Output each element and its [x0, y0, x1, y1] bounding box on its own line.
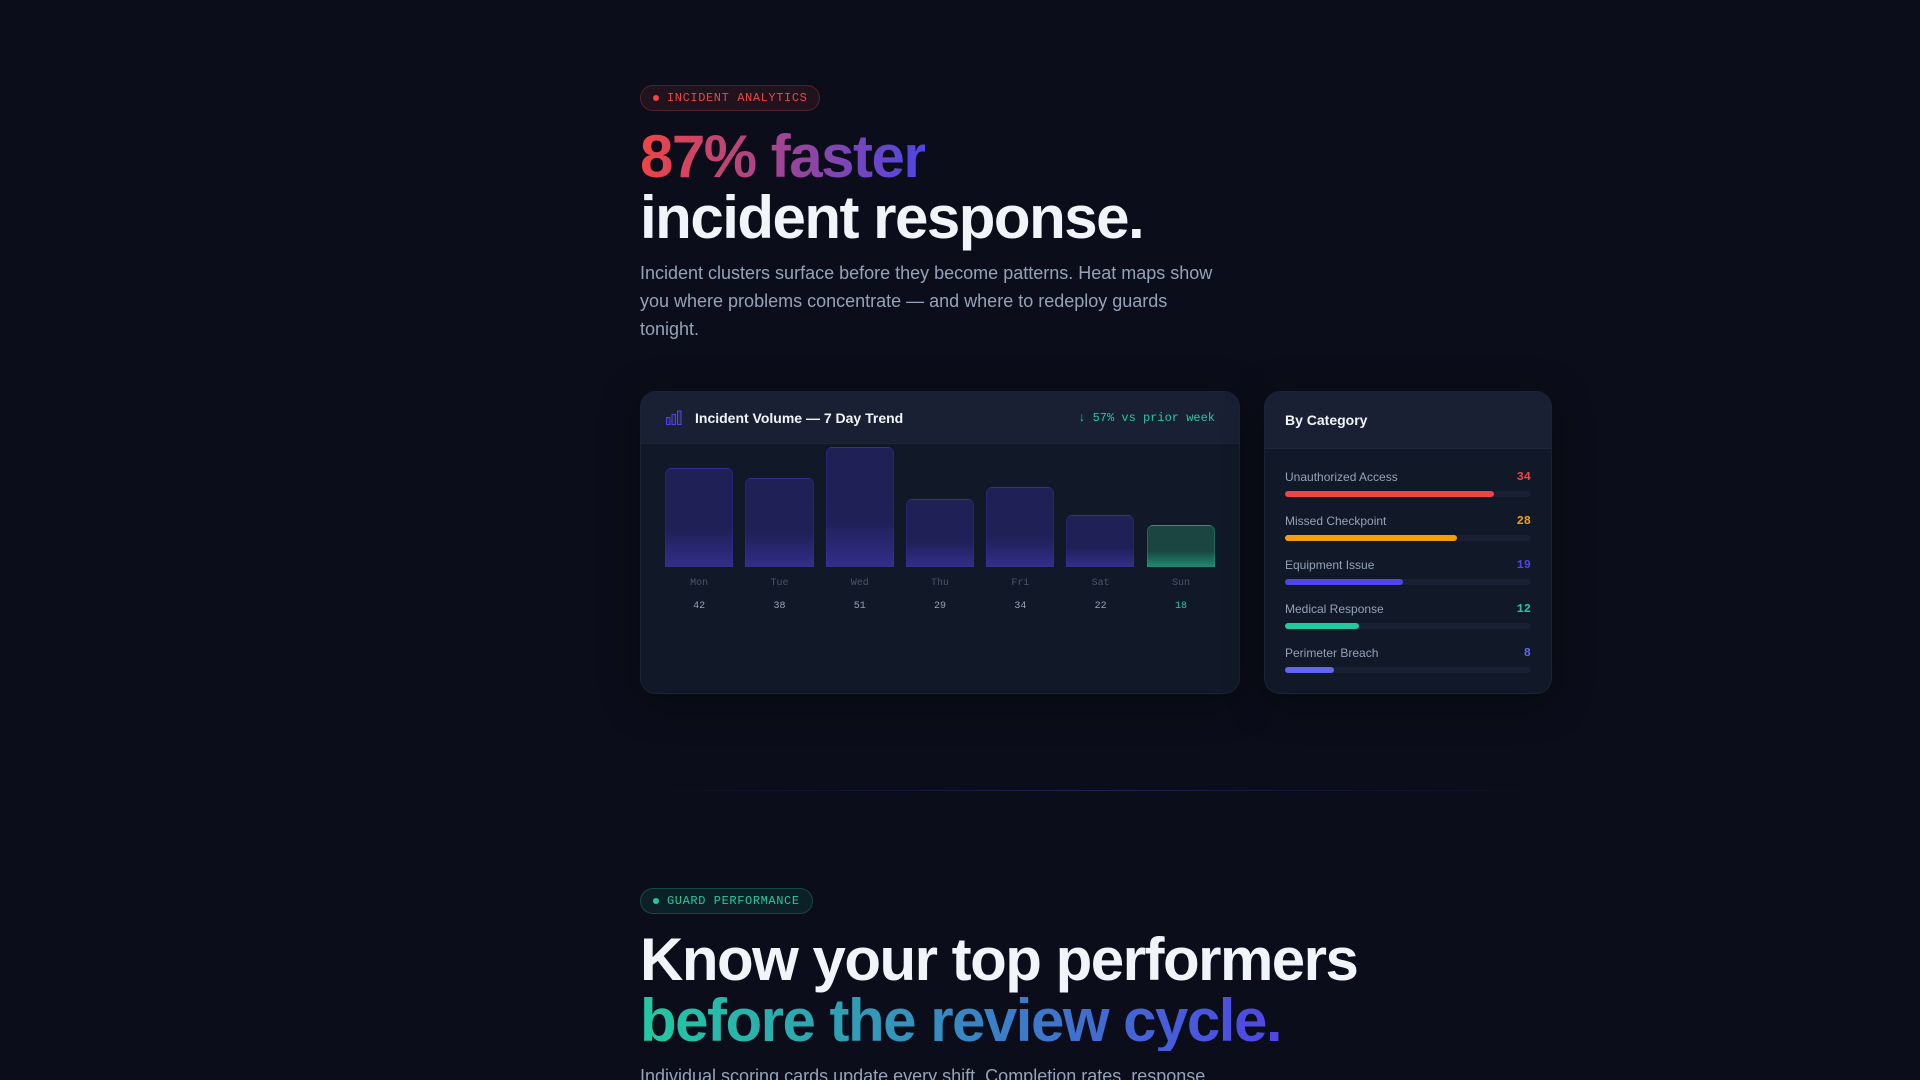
value labels: 42: [693, 601, 705, 612]
chart title: Incident Volume — 7 Day Trend: [695, 410, 903, 426]
bar: Thu: [906, 499, 974, 567]
row: unauthorized access: 34: [1517, 470, 1531, 484]
axis labels: [690, 578, 1190, 589]
row: perimeter breach: 8: [1524, 646, 1531, 660]
row: missed checkpoint: 28: [1517, 514, 1531, 528]
row: perimeter breach: [1285, 646, 1531, 673]
badge: guard performance: [640, 888, 813, 914]
row: unauthorized access: [1285, 470, 1531, 497]
row: medical response: 12: [1517, 602, 1531, 616]
axis labels: Thu: [931, 578, 949, 589]
bar: Tue: [745, 478, 814, 567]
bar: Sun: [1147, 525, 1215, 567]
row: equipment issue: 19: [1517, 558, 1531, 572]
icon: bar chart: [666, 410, 682, 425]
text block: incident analytics description: [640, 263, 1212, 339]
badge: incident analytics: [640, 85, 820, 111]
row: perimeter breach: Perimeter Breach: [1285, 646, 1378, 660]
heading: know your top performers: before the review cycle.: [640, 986, 1281, 1054]
row: missed checkpoint: Missed Checkpoint: [1285, 514, 1386, 528]
trend note: ↓ 57% vs prior week: [1078, 411, 1215, 425]
bar: Mon: [665, 468, 733, 567]
text block: incident analytics description: tonight.: [640, 319, 699, 339]
row: medical response: [1285, 602, 1531, 629]
axis labels: Tue: [770, 578, 788, 589]
text block: incident analytics description: Incident clusters surface before they become patterns. Heat maps show: [640, 263, 1212, 283]
heading: know your top performers: Know your top performers: [640, 926, 1357, 993]
badge: guard performance: GUARD PERFORMANCE: [667, 894, 800, 908]
panel header: by category: [1265, 392, 1551, 449]
panel header: incident volume: [641, 392, 1239, 444]
bar: Fri: [986, 487, 1054, 567]
value labels: 38: [773, 601, 785, 612]
bar: Wed: [826, 447, 894, 567]
text block: incident analytics description: you where problems concentrate — and where to redeploy guards: [640, 291, 1167, 311]
axis labels: Wed: [851, 578, 869, 589]
axis labels: Sun: [1172, 578, 1190, 589]
panel: by category: [1264, 391, 1552, 694]
heading: 87% faster incident response: 87% faster: [640, 123, 925, 190]
value labels: [693, 601, 1187, 612]
row: missed checkpoint: [1285, 514, 1531, 541]
row: medical response: Medical Response: [1285, 602, 1384, 616]
row: equipment issue: Equipment Issue: [1285, 558, 1374, 572]
row: unauthorized access: Unauthorized Access: [1285, 470, 1398, 484]
panel title: By Category: [1285, 412, 1367, 428]
value labels: 29: [934, 601, 946, 612]
bar: Sat: [1066, 515, 1134, 567]
bar chart: seven day incidents: [665, 447, 1215, 612]
heading: know your top performers: [640, 926, 1357, 1054]
value labels: 18: [1175, 601, 1187, 612]
axis labels: Sat: [1092, 578, 1110, 589]
axis labels: Fri: [1011, 578, 1029, 589]
row: equipment issue: [1285, 558, 1531, 585]
panel: incident volume trend: [640, 391, 1240, 694]
value labels: 22: [1095, 601, 1107, 612]
heading: 87% faster incident response: incident response.: [640, 184, 1143, 250]
heading: 87% faster incident response: [640, 123, 1143, 250]
badge: incident analytics: INCIDENT ANALYTICS: [667, 91, 807, 105]
value labels: 34: [1014, 601, 1026, 612]
axis labels: Mon: [690, 578, 708, 589]
value labels: 51: [854, 601, 866, 612]
